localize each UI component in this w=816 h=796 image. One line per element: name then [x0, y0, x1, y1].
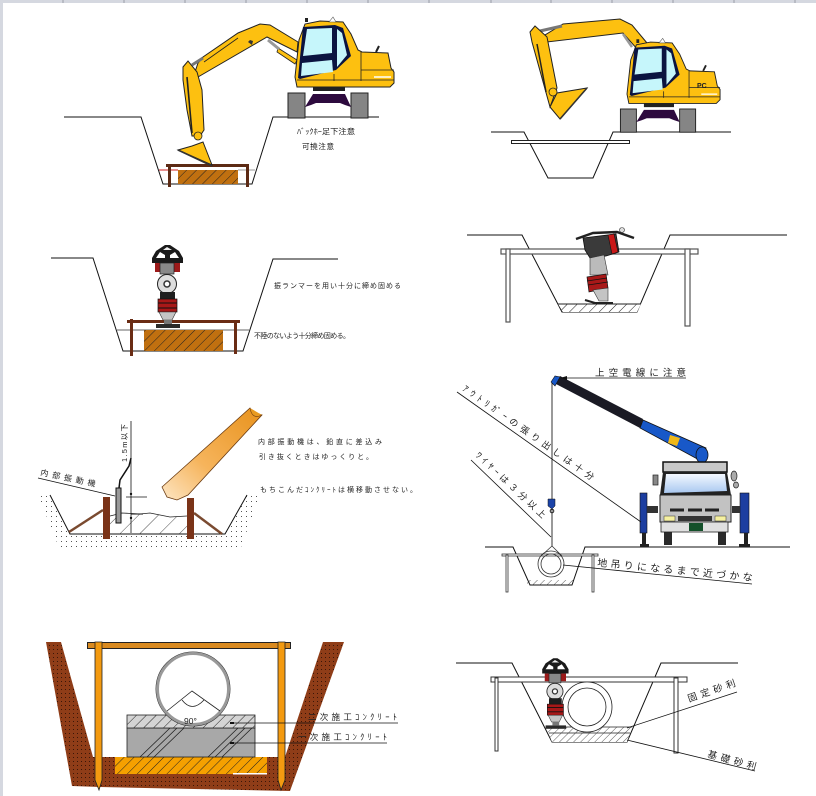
ground and trench [485, 547, 790, 585]
soil [46, 642, 344, 791]
vibrator notes: 内部振動機は、鉛直に差込み [258, 437, 382, 446]
trench outline [64, 117, 379, 184]
fresh concrete [110, 513, 187, 534]
caution text: ﾊﾞｯｸﾎｰ足下注意 [297, 126, 356, 136]
tamping rammer [152, 245, 183, 328]
trench outline [51, 258, 338, 351]
crane boom [551, 376, 708, 463]
vibrator [116, 458, 131, 523]
foundation gravel label [627, 740, 758, 773]
excavator [530, 19, 720, 132]
plank and posts [491, 677, 687, 753]
foundation block [178, 170, 238, 184]
gravel base [558, 304, 641, 312]
insertion depth dimension [120, 421, 147, 533]
insertion depth dimension: 1.5m以下 [120, 424, 129, 462]
overhead wire note: 上空電線に注意 [595, 367, 686, 379]
panel: gravel bedding with rammer [456, 658, 758, 773]
foundation gravel label: 基礎砂利 [706, 748, 758, 773]
caution text [297, 126, 356, 151]
model mark: PC [697, 83, 707, 90]
tamping rammer side view [576, 228, 634, 303]
foundation block [144, 330, 223, 351]
wire and hook [548, 383, 555, 546]
trench outline [491, 132, 731, 178]
panel: front view rammer on plank [51, 245, 401, 356]
sheeting plank and posts [166, 164, 249, 187]
trench outline [467, 235, 787, 312]
panel: excavator on plank over trench [64, 17, 394, 187]
vibrator notes: もちこんだｺﾝｸﾘｰﾄは横移動させない。 [260, 485, 417, 494]
plank and posts [501, 249, 698, 326]
concrete chute [162, 408, 262, 500]
secondary concrete [127, 715, 255, 728]
concrete labels: 一次施工ｺﾝｸﾘｰﾄ [298, 732, 387, 742]
compaction notes: 振ランマーを用い十分に締め固める [274, 281, 401, 290]
vibrator notes [258, 437, 417, 494]
panel: pipe bedding cross-section [46, 642, 398, 791]
gravel layers [546, 727, 632, 742]
trench outline [456, 663, 738, 742]
top beam and posts [88, 642, 290, 790]
compaction notes: 不陸のないよう十分締め固める。 [254, 331, 350, 340]
approach warning note: 地吊りになるまで近づかな [597, 556, 753, 584]
outrigger note [457, 383, 641, 522]
tamping rammer [542, 658, 569, 729]
excavator [178, 17, 394, 166]
vibrator label: 内部振動機 [40, 467, 96, 489]
overhead wire note [560, 367, 686, 380]
compaction notes [254, 281, 401, 340]
primary concrete [127, 728, 255, 757]
excavation outline [50, 495, 247, 534]
pipe and sling [538, 546, 564, 577]
concrete labels: 二次施工ｺﾝｸﾘｰﾄ [308, 712, 397, 722]
soil with dots [38, 495, 260, 550]
pipe [156, 652, 230, 726]
plank [512, 140, 630, 144]
truck front view [640, 462, 750, 547]
vibrator notes: 引き抜くときはゆっくりと。 [259, 452, 373, 461]
formwork posts and braces [69, 497, 222, 539]
trench plank posts and gravel [502, 554, 598, 592]
pipe: 90° [184, 716, 197, 726]
pipe [562, 682, 612, 732]
vibrator label [38, 467, 115, 496]
wire note: ﾜｲﾔｰは３分以上 [474, 450, 548, 520]
panel: excavator digging trench [491, 19, 731, 178]
panel: crane truck lifting pipe [457, 367, 790, 592]
fixing gravel label [627, 677, 737, 728]
outrigger note: ｱｳﾄﾘｶﾞｰの張り出しは十分 [461, 383, 597, 482]
fixing gravel label: 固定砂利 [686, 677, 737, 705]
panel: side view rammer in trench [467, 228, 787, 326]
base layer [115, 757, 267, 774]
plank and posts [127, 319, 240, 356]
caution text: 可撓注意 [302, 141, 334, 151]
concrete labels [230, 712, 398, 744]
panel: internal vibrator and chute [38, 408, 417, 550]
